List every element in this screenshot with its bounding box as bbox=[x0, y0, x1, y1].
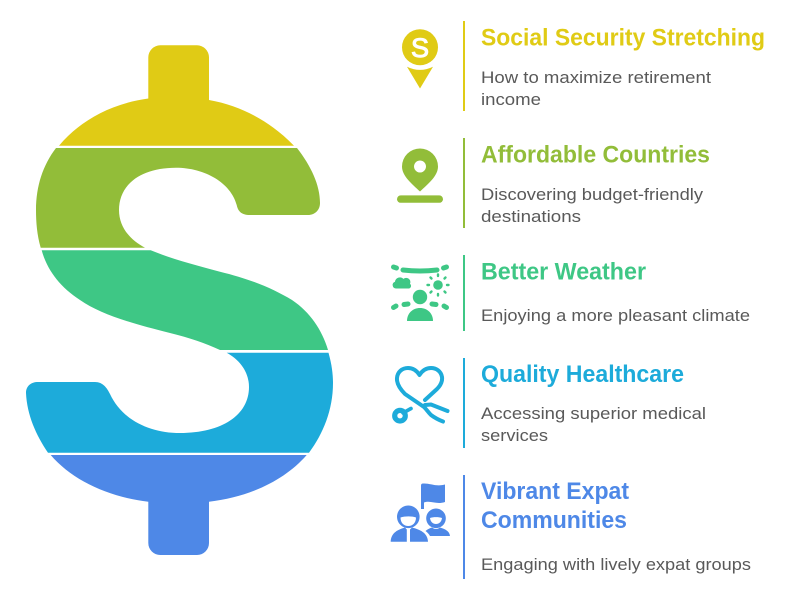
heading: Affordable Countries bbox=[481, 142, 710, 168]
icon: coin and pointer: S bbox=[411, 33, 429, 63]
description: Engaging with lively expat groups bbox=[481, 556, 751, 574]
item: quality healthcare bbox=[395, 358, 706, 448]
icon: people with flag bbox=[391, 483, 450, 542]
item: social security stretching bbox=[402, 21, 765, 111]
description: How to maximize retirement bbox=[481, 69, 711, 87]
heading: Vibrant Expat bbox=[481, 478, 629, 505]
dollar segment: better weather bbox=[42, 250, 328, 350]
description: Accessing superior medical bbox=[481, 405, 706, 423]
description: services bbox=[481, 427, 548, 445]
heading: Social Security Stretching bbox=[481, 24, 765, 52]
description: destinations bbox=[481, 208, 581, 226]
divider line bbox=[463, 358, 465, 448]
heading: Quality Healthcare bbox=[481, 361, 684, 388]
dollar segment: quality healthcare bbox=[26, 353, 333, 453]
icon: heart stethoscope bbox=[395, 368, 448, 422]
divider line bbox=[463, 21, 465, 111]
heading: Better Weather bbox=[481, 258, 646, 286]
icon: person under weather arc bbox=[393, 267, 448, 321]
divider line bbox=[463, 138, 465, 228]
icon: map pin bbox=[397, 148, 443, 203]
item: vibrant expat communities bbox=[391, 475, 751, 579]
dollar segment: expat communities bbox=[51, 455, 307, 555]
item: affordable countries bbox=[397, 138, 710, 228]
description: income bbox=[481, 91, 541, 109]
description: Enjoying a more pleasant climate bbox=[481, 307, 750, 325]
divider line bbox=[463, 475, 465, 579]
dollar segment: affordable countries bbox=[36, 148, 320, 248]
divider line bbox=[463, 255, 465, 331]
heading: Communities bbox=[481, 507, 627, 534]
dollar sign chart bbox=[26, 45, 333, 555]
icon: coin and pointer bbox=[402, 29, 438, 88]
dollar segment: social security bbox=[59, 45, 294, 146]
item: better weather bbox=[393, 255, 750, 331]
description: Discovering budget-friendly bbox=[481, 186, 704, 204]
